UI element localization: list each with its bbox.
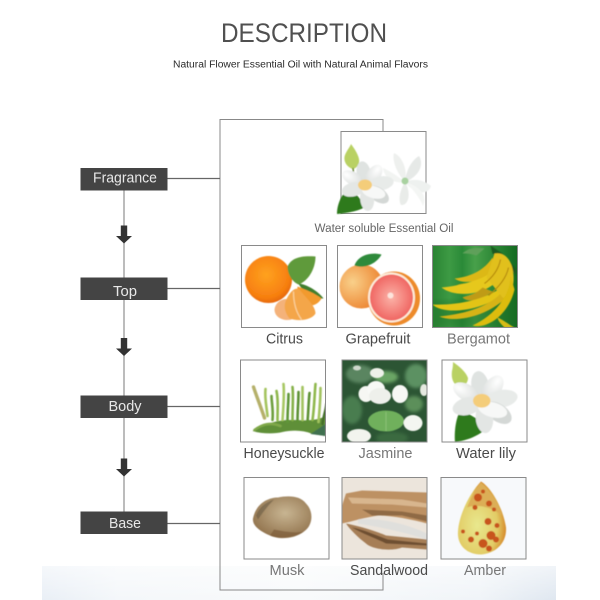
- title: DESCRIPTION: [221, 18, 387, 48]
- stage: Body: [80, 396, 168, 418]
- label: Musk: [270, 563, 305, 579]
- caption: Water soluble Essential Oil: [314, 223, 454, 235]
- bracket frame connecting stages to ingredients: [220, 120, 383, 590]
- background band: [42, 566, 556, 600]
- flow connector lines: [124, 178, 220, 524]
- label: Sandalwood: [350, 563, 428, 579]
- icon: buddha's hand citron: [432, 246, 518, 328]
- card: Water lily: [442, 360, 527, 462]
- label: Amber: [464, 563, 506, 579]
- icon: sandalwood sticks: [342, 478, 427, 560]
- stage: Base: [80, 512, 168, 534]
- subtitle: Natural Flower Essential Oil with Natural Animal Flavors: [173, 60, 428, 70]
- arrow: top to body: [116, 338, 132, 356]
- label: Grapefruit: [346, 332, 410, 348]
- stage: Top: [80, 278, 168, 300]
- card: water soluble essential oil: [314, 132, 454, 235]
- arrow: body to base: [116, 458, 132, 476]
- icon: orange and segments: [245, 256, 324, 320]
- icon: musk pod: [253, 496, 311, 538]
- icon: amber teardrop: [458, 482, 506, 554]
- stage: Top: Top: [113, 284, 137, 300]
- card: Honeysuckle: [240, 360, 326, 462]
- stage: Fragrance: Fragrance: [93, 170, 157, 186]
- card: Amber: [441, 478, 526, 579]
- stage: Fragrance: [80, 168, 168, 190]
- card: Grapefruit: [338, 246, 422, 348]
- card: Jasmine: [342, 360, 428, 462]
- label: Citrus: [266, 332, 303, 348]
- icon: green sprigs: [252, 384, 326, 436]
- card: Musk: [244, 478, 329, 579]
- icon: jasmine bush: [342, 360, 428, 444]
- label: Bergamot: [447, 332, 510, 348]
- right lily: [383, 153, 431, 206]
- label: Jasmine: [358, 446, 412, 462]
- card: Citrus: [242, 246, 326, 348]
- card: Sandalwood: [342, 478, 428, 579]
- icon: white flowers: [337, 144, 431, 214]
- left lily: [339, 160, 395, 212]
- card: Bergamot: [432, 246, 518, 348]
- stage: Body: Body: [108, 399, 142, 415]
- arrow: fragrance to top: [116, 226, 132, 244]
- label: Honeysuckle: [244, 446, 324, 462]
- label: Water lily: [456, 446, 517, 462]
- stage: Base: Base: [109, 516, 141, 532]
- icon: grapefruit and half: [340, 254, 420, 326]
- icon: water lily: [450, 362, 519, 442]
